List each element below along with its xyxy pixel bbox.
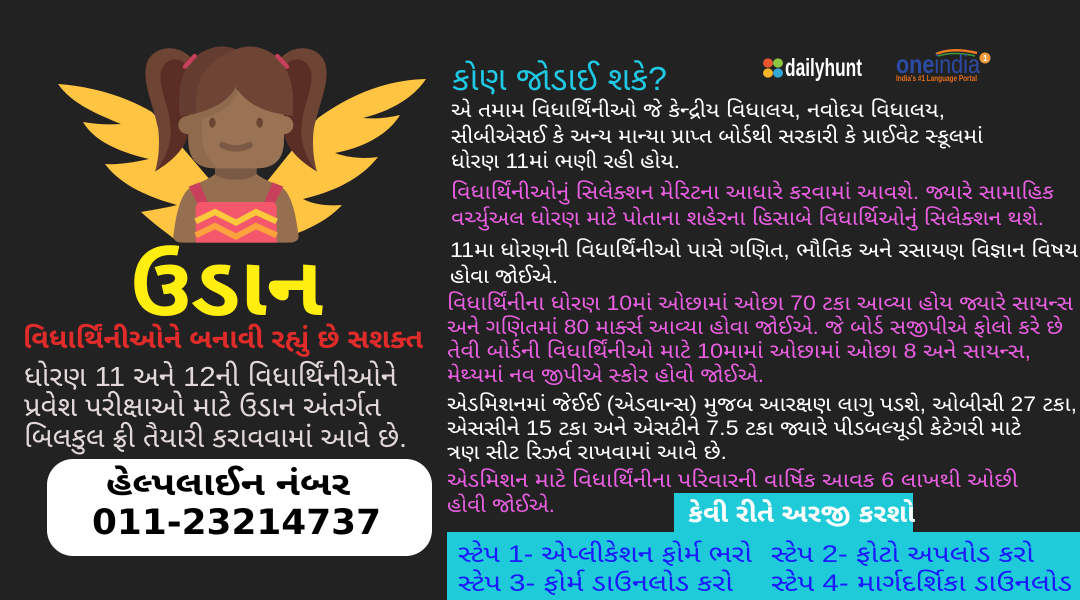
- helpline box: [47, 459, 432, 556]
- text block: reservation: ત્રણ સીટ રિઝર્વ રાખવામાં આવે છે.: [447, 439, 727, 464]
- right ponytail: [272, 48, 327, 172]
- text block: selection: વિધાર્થિંનીઓનું સિલેક્શન મેરિટના આધારે કરવામાં આવશે. જ્યારે સામાહિક: [451, 179, 1054, 205]
- text block: subjects: [450, 237, 1079, 288]
- icon: right wing: [240, 79, 426, 233]
- neck: [215, 160, 257, 185]
- icon: left wing: [58, 84, 240, 240]
- hair top: [179, 46, 293, 116]
- text block: programme description: પ્રવેશ પરીક્ષાઓ માટે ઉડાન અંતર્ગત: [24, 390, 381, 422]
- step 2: સ્ટેપ 2- ફોટો અપલોડ કરો: [771, 539, 1035, 568]
- logo wordmark: oneindia: [896, 49, 980, 79]
- text block: income: [447, 467, 1018, 517]
- helpline label: હેલ્પલાઈન નંબર: [106, 465, 350, 502]
- logo arcs: [936, 50, 977, 54]
- heading: who can join: કોણ જોડાઈ શકે?: [452, 60, 667, 97]
- left ponytail: [145, 48, 200, 172]
- icon: girl: [145, 46, 327, 243]
- text block: eligibility: સીબીએસઈ કે અન્ય માન્યા પ્રાપ્ત બોર્ડથી સરકારી કે પ્રાઈવેટ સ્કૂલમાં: [451, 123, 983, 149]
- eyes: [209, 118, 216, 128]
- ears: [178, 116, 196, 134]
- logo: dailyhunt: [763, 54, 862, 82]
- title: ઉડાન: [130, 239, 323, 333]
- step 1: સ્ટેપ 1- એપ્લીકેશન ફોર્મ ભરો: [458, 539, 753, 568]
- logo petals: [763, 58, 773, 68]
- text block: marks: [447, 290, 1073, 387]
- torso and arms: [173, 174, 299, 243]
- text block: eligibility: [451, 97, 983, 173]
- logo badge number: 1: [983, 54, 988, 63]
- text block: programme description: ધોરણ 11 અને 12ની વિધાર્થિંનીઓને: [24, 360, 398, 392]
- face: [188, 90, 284, 168]
- subtitle: વિધાર્થિંનીઓને બનાવી રહ્યું છે સશક્ત: [23, 323, 423, 356]
- logo badge: [980, 52, 990, 64]
- text block: income: એડમિશન માટે વિધાર્થિંનીના પરિવારની વાર્ષિક આવક 6 લાખથી ઓછી: [447, 467, 1018, 492]
- text block: income: હોવી જોઈએ.: [447, 492, 555, 517]
- smile: [222, 145, 250, 148]
- heading tab: how to apply: કેવી રીતે અરજી કરશો: [688, 498, 915, 528]
- face shadow: [188, 90, 217, 168]
- text block: marks: વિધાર્થિંનીના ધોરણ 10માં ઓછામાં ઓછા 70 ટકા આવ્યા હોય જ્યારે સાયન્સ: [447, 290, 1073, 315]
- text block: marks: તેવી બોર્ડની વિધાર્થિંનીઓ માટે 10મામાં ઓછામાં ઓછા 8 અને સાયન્સ,: [447, 338, 1031, 363]
- illustration: girl with wings: [58, 46, 426, 243]
- text block: selection: વર્ચ્યુઅલ ધોરણ માટે પોતાના શહેરના હિસાબે વિધાર્થિઓનું સિલેક્શન થશે.: [451, 205, 1044, 231]
- text block: programme description: [24, 360, 407, 455]
- text block: reservation: [447, 391, 1077, 464]
- logo wordmark: dailyhunt: [785, 54, 862, 82]
- text block: subjects: હોવા જોઈએ.: [450, 263, 558, 288]
- forehead shadow: [200, 85, 237, 119]
- text block: marks: મેથ્યમાં નવ જીપીએ સ્કોર હોવો જોઈએ.: [447, 362, 764, 387]
- hair ties: [185, 56, 287, 67]
- text block: selection: [451, 179, 1054, 231]
- dress: [196, 202, 277, 243]
- heading tab: how to apply: [674, 493, 915, 533]
- text block: eligibility: એ તમામ વિધાર્થિંનીઓ જે કેન્દ્રીય વિધાલય, નવોદય વિધાલય,: [451, 97, 945, 122]
- text block: reservation: એસસીને 15 ટકા અને એસટીને 7.5 ટકા જ્યારે પીડબલ્યૂડી કેટેગરી માટે: [447, 415, 1022, 441]
- logo: oneindia: [896, 49, 990, 83]
- dress straps: [189, 182, 283, 203]
- step 3: સ્ટેપ 3- ફોર્મ ડાઉનલોડ કરો: [458, 568, 734, 597]
- step 4: સ્ટેપ 4- માર્ગદર્શિકા ડાઉનલોડ: [771, 568, 1072, 597]
- dress zigzags: [196, 212, 277, 223]
- panel: how to apply steps: [447, 493, 1080, 600]
- text block: eligibility: ધોરણ 11માં ભણી રહી હોય.: [451, 149, 680, 173]
- logo tagline: India's #1 Language Portal: [896, 74, 977, 83]
- text block: programme description: બિલકુલ ફ્રી તૈયારી કરાવવામાં આવે છે.: [24, 421, 407, 455]
- text block: subjects: 11મા ધોરણની વિધાર્થિંનીઓ પાસે ગણિત, ભૌતિક અને રસાયણ વિજ્ઞાન વિષય: [450, 237, 1079, 262]
- helpline number: 011-23214737: [92, 503, 381, 543]
- text block: reservation: એડમિશનમાં જેઈઈ (એડવાન્સ) મુજબ આરક્ષણ લાગુ પડશે, ઓબીસી 27 ટકા,: [447, 391, 1077, 417]
- text block: marks: અને ગણિતમાં 80 માર્ક્સ આવ્યા હોવા જોઈએ. જે બોર્ડ સજીપીએ ફોલો કરે છે: [447, 314, 1063, 339]
